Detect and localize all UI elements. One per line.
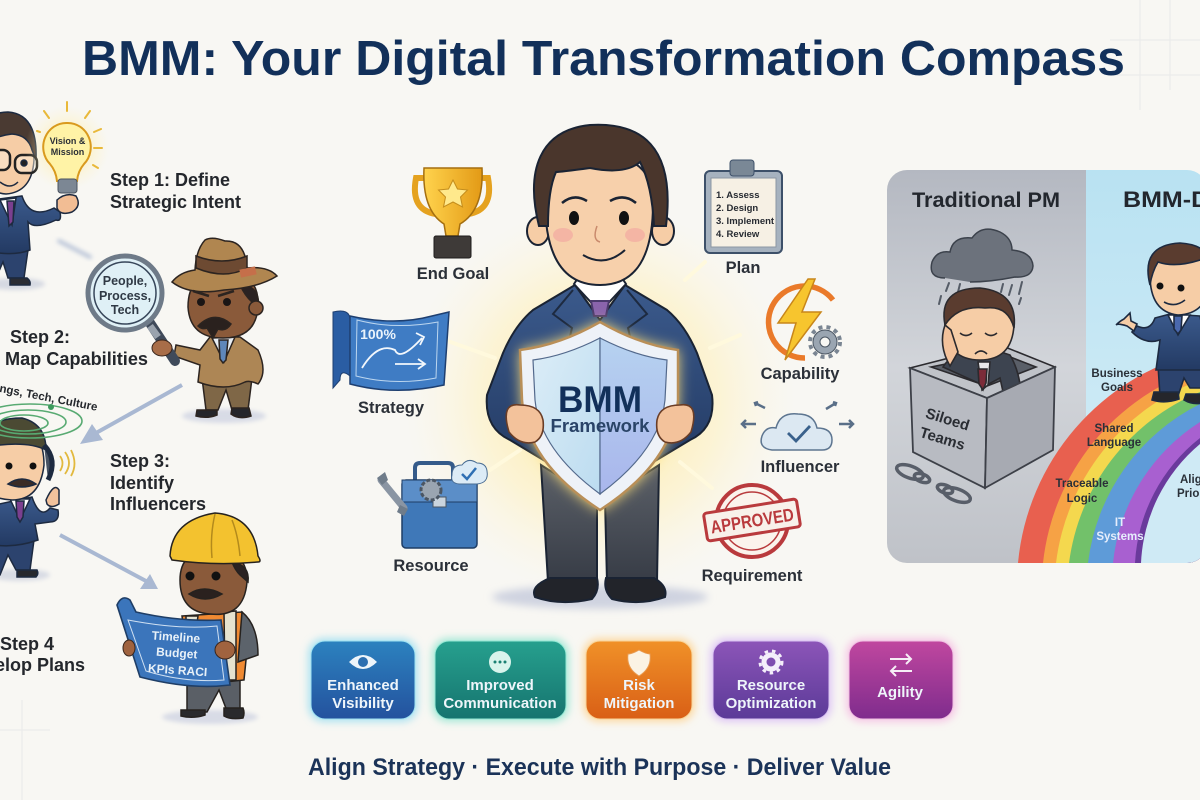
rainbow labels: Shared [1094,423,1134,435]
icon: strategy map: 100% [360,326,396,342]
central glow [405,205,795,595]
icon: lightbulb vision and mission: Mission [51,147,84,157]
icon: magnifying glass people process tech: Tech [111,303,139,317]
icon: rain cloud [931,229,1033,304]
step 2 label: Step 2: [10,327,70,347]
rainbow labels: Systems [1096,531,1144,543]
icon: plan clipboard [705,160,782,253]
label: capability: Capability [761,365,840,383]
rainbow [1018,352,1200,563]
silo box with label: Teams [918,424,967,454]
rainbow labels: IT [1115,517,1125,529]
figure: siloed person in box [908,287,1057,397]
jacket [487,285,713,470]
benefit: enhanced visibility: Visibility [332,695,394,712]
arrow: step 3 to step 4 [60,535,158,589]
silo box with label: Siloed [923,405,971,434]
icon: magnifying glass people process tech: Process, [99,289,151,303]
ears [527,217,549,245]
shoes [534,578,666,602]
ground shadow [492,585,708,609]
facial features [553,197,645,260]
figure: happy manager on rainbow [1116,243,1200,404]
hands [506,405,694,443]
trousers [541,465,659,582]
panel: step 3 identify influencers [0,383,206,581]
icon: lightbulb vision and mission: Vision & [50,136,86,146]
benefit: risk mitigation: Risk [623,677,655,694]
panel: comparison traditional vs BMM-driven [887,170,1200,563]
label: plan: Plan [726,259,760,277]
step 3 label: Identify [110,473,174,493]
footer tagline: Align Strategy · Execute with Purpose · Deliver Value [308,754,891,781]
rainbow labels: Traceable [1055,478,1109,490]
icon: blueprint timeline budget KPIs RACI [117,598,235,686]
icon: influencer cloud [742,402,853,450]
step 3 label: Step 3: [110,451,170,471]
icon: strategy map [333,311,449,390]
rainbow labels [1055,368,1200,543]
shield [520,322,678,510]
rainbow labels: Business [1091,368,1143,380]
benefit: improved communication [432,638,569,722]
title: BMM: Your Digital Transformation Compass [82,32,1125,86]
label: influencer: Influencer [761,458,840,476]
panel: step 2 map capabilities [5,238,277,423]
icon: plan clipboard: 1. Assess [716,190,760,201]
benefit: risk mitigation: Mitigation [604,695,674,712]
shield label: BMM [558,379,642,420]
icon: plan clipboard: 4. Review [716,229,760,240]
icon: approved stamp [703,485,801,557]
central figure: manager holding shield [487,125,713,609]
silo box with label [910,367,1055,488]
panel: step 1 define strategic intent [0,102,241,290]
label: requirement: Requirement [702,567,803,585]
rainbow labels: Language [1087,437,1141,449]
benefit: enhanced visibility: Enhanced [327,677,399,694]
step 2 label: Map Capabilities [5,349,148,369]
icon: orbit rings [0,404,82,438]
label: resource: Resource [393,557,469,575]
shield: Framework [550,416,651,436]
panel: step 4 develop plans [0,513,260,724]
benefit: enhanced visibility [308,638,418,722]
icon: resource toolbox [377,460,487,548]
arrow: step 2 to step 3 [80,385,182,444]
figure: manager with glasses [0,112,78,290]
benefit: risk mitigation [583,638,695,722]
icon: capability lightning and gear [769,279,840,360]
step 1 label: Step 1: Define [110,170,230,190]
benefit: resource optimization [710,638,832,722]
benefit: resource optimization: Resource [737,677,805,694]
icon: blueprint timeline budget KPIs RACI: Budget [156,645,198,662]
icon: trophy end goal [415,168,489,258]
rainbow labels: Logic [1067,493,1098,505]
benefit: improved communication: Improved [466,677,534,694]
shirt and tie [574,275,626,312]
icon: sound waves [60,450,74,476]
step 4 label: Step 4 [0,634,54,654]
icon: magnifying glass people process tech: People, [103,274,147,288]
face [545,155,653,285]
arrow: faint step 1 to step 2 [59,241,90,257]
benefit: improved communication: Communication [443,695,557,712]
label: end goal: End Goal [417,265,489,283]
figure: detective [172,238,277,423]
icon: blueprint timeline budget KPIs RACI: Timeline [151,628,201,646]
benefit: agility: Agility [877,684,924,701]
hair [534,125,668,226]
icon: magnifying glass people process tech [88,256,175,361]
rainbow labels: Goals [1101,382,1133,394]
icon: lightbulb vision and mission [25,102,109,193]
benefit: agility [846,638,956,722]
figure: manager with headset [0,418,59,581]
icon: blueprint timeline budget KPIs RACI: KPIs RACI [148,661,208,679]
heading: traditional PM: Traditional PM [912,188,1060,212]
label: strategy: Strategy [358,399,425,417]
icon: approved stamp: APPROVED [709,505,795,537]
icon: plan clipboard: 3. Implement [716,216,775,227]
step 3 label: Influencers [110,494,206,514]
step 1 label: Strategic Intent [110,192,241,212]
icon: broken chain [895,462,972,505]
icon: plan clipboard: 2. Design [716,203,758,214]
BMM-driven background [1086,170,1200,416]
ring caption: ngs, Tech, Culture [0,383,98,414]
figure: construction worker [162,513,260,724]
benefit: resource optimization: Optimization [726,695,816,712]
traditional PM background [887,170,1086,563]
